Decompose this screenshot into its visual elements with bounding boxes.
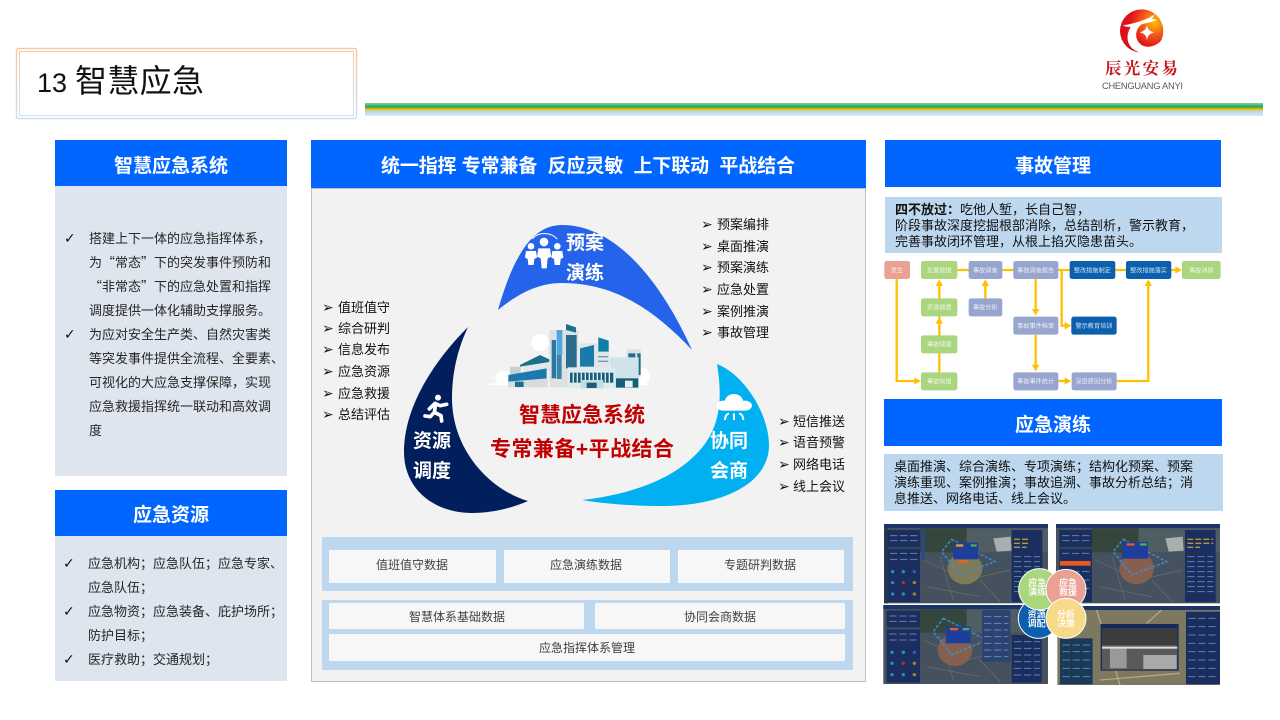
screenshots collage [883, 524, 1220, 685]
flow chart: 警示教育培训 [1076, 322, 1112, 330]
screenshot: bottom right [1057, 606, 1220, 685]
list: plan drills: 案例推演 [717, 304, 769, 319]
heading: emergency resources [55, 490, 287, 536]
list: collaborative consultation: 短信推送 [793, 414, 845, 429]
heading: smart emergency system: 智慧应急系统 [114, 154, 228, 177]
diagram: four circles: 应急 [1028, 577, 1046, 588]
logo: CHENGUANG ANYI [1102, 81, 1183, 91]
segment: plan drills [498, 225, 692, 350]
segment: collaborative consultation: 会商 [710, 460, 748, 482]
list: plan drills: 桌面推演 [717, 239, 769, 254]
list: collaborative consultation: 语音预警 [793, 435, 845, 450]
title box: 智慧应急 [75, 63, 204, 99]
center title: 智慧应急系统 [519, 403, 645, 427]
flow chart: 处置救援 [927, 266, 952, 274]
data row 2: 应急指挥体系管理 [539, 640, 635, 655]
screenshot: bottom left [883, 605, 1048, 684]
center title [490, 403, 674, 461]
text block: system description: 应急救援指挥统一联动和高效调 [89, 399, 271, 414]
segment: resource dispatch: 资源 [413, 430, 451, 452]
list: plan drills: 事故管理 [717, 325, 769, 340]
flow chart: 事故事件档案 [1017, 322, 1054, 330]
text block: resources list: 应急机构；应急队伍；应急专家、 [88, 556, 283, 572]
list: resource dispatch: 综合研判 [338, 321, 390, 336]
diagram: four circles: 演练 [1028, 586, 1046, 597]
screenshot: top left [884, 524, 1048, 603]
text block: system description: 为应对安全生产类、自然灾害类 [89, 327, 271, 342]
list: resource dispatch: ➢ [322, 407, 334, 423]
heading: accident management: 事故管理 [1015, 154, 1091, 177]
list: collaborative consultation: 网络电话 [793, 457, 845, 472]
diagram: four circles: 救援 [1059, 586, 1077, 597]
logo [1102, 9, 1183, 91]
text block: resources list: 防护目标； [88, 628, 153, 644]
center title: 专常兼备+平战结合 [490, 438, 674, 461]
text block: drills description: 息推送、网络电话、线上会议。 [894, 491, 1076, 506]
text block: four no-release: 完善事故闭环管理，从根上掐灭隐患苗头。 [895, 234, 1142, 249]
list: collaborative consultation: 线上会议 [793, 479, 845, 494]
text block: system description: 为“常态”下的突发事件预防和 [89, 252, 271, 271]
list: resource dispatch: 应急资源 [338, 364, 390, 379]
flow chart: 事故调查报告 [1017, 266, 1054, 274]
diagram: four circles [1018, 569, 1086, 638]
text block: resources list: 应急物资；应急装备、庇护场所； [88, 604, 283, 620]
list: plan drills: ➢ [701, 217, 713, 233]
list: plan drills: ➢ [701, 282, 713, 298]
text block: system description: 搭建上下一体的应急指挥体系， [89, 231, 271, 246]
text block: system description [64, 231, 284, 438]
list: resource dispatch: ➢ [322, 300, 334, 316]
flow chart [884, 261, 1221, 390]
segment: plan drills: 预案 [566, 231, 604, 254]
text block: resources list: 应急队伍； [88, 580, 153, 596]
diagram: four circles: 决策 [1057, 618, 1075, 629]
panel: smart emergency system [55, 140, 287, 476]
panel: emergency drills [883, 399, 1223, 685]
text block: drills description: 桌面推演、综合演练、专项演练；结构化预案、预案 [894, 459, 1193, 475]
icon: cloud [716, 394, 752, 420]
list: resource dispatch: 总结评估 [338, 407, 390, 422]
text block: system description: “非常态”下的应急处置和指挥 [89, 276, 271, 295]
flow chart: 事故消除 [1189, 266, 1214, 274]
list: resource dispatch: ➢ [322, 321, 334, 337]
list: resource dispatch: ➢ [322, 386, 334, 402]
text block: four no-release: 阶段事故深度挖掘根部消除，总结剖析，警示教育， [895, 218, 1194, 233]
diagram: four circles: 调配 [1028, 618, 1046, 629]
flow chart: 事故分析 [973, 304, 998, 312]
list: plan drills: 预案编排 [717, 217, 769, 232]
flow chart: 事故快报 [927, 378, 952, 386]
data row 1 [322, 537, 853, 591]
panel: center system [311, 140, 866, 682]
icon: runner [425, 395, 447, 421]
text block: resources list: ✓ [63, 556, 75, 572]
panel: accident management [884, 140, 1222, 390]
list: resource dispatch: 值班值守 [338, 300, 390, 315]
data row 2 [322, 600, 853, 670]
segment: plan drills: 演练 [566, 261, 604, 284]
list: plan drills: ➢ [701, 260, 713, 276]
heading: accident management [885, 140, 1221, 187]
list: plan drills: ➢ [701, 304, 713, 320]
flow chart: 资源调度 [927, 304, 952, 312]
flow chart: 深层原因分析 [1076, 378, 1112, 386]
list: plan drills: 预案演练 [717, 260, 769, 275]
text block: system description: 可视化的大应急支撑保障，实现 [89, 375, 271, 390]
list: resource dispatch: 信息发布 [338, 342, 390, 357]
text block: four no-release [885, 197, 1222, 253]
text block: drills description: 演练重现、案例推演；事故追溯、事故分析总结；消 [894, 475, 1193, 491]
text block: resources list: 医疗救助；交通规划； [88, 652, 218, 668]
heading: emergency drills: 应急演练 [1015, 413, 1091, 436]
heading: center slogan: 统一指挥 专常兼备 反应灵敏 上下联动 平战结合 [381, 154, 795, 177]
title box [16, 48, 356, 118]
segment: collaborative consultation: 协同 [710, 430, 748, 452]
title box: 13 [37, 68, 67, 98]
screenshot: top right [1056, 524, 1220, 603]
header band [365, 103, 1263, 116]
icon: building [490, 324, 650, 388]
text block: resources list: ✓ [63, 652, 75, 668]
data row 2: 智慧体系基础数据 [409, 609, 505, 624]
flow chart: 事故续报 [927, 341, 952, 349]
flow chart: 整改措施落实 [1130, 266, 1167, 274]
data row 1: 值班值守数据 [376, 557, 448, 572]
list: resource dispatch: ➢ [322, 364, 334, 380]
list: plan drills: ➢ [701, 325, 713, 341]
list: collaborative consultation [778, 414, 845, 495]
text block: system description: 等突发事件提供全流程、全要素、 [89, 351, 284, 366]
heading: emergency drills [884, 399, 1222, 446]
logo: 辰光安易 [1105, 55, 1178, 79]
list: plan drills [701, 217, 769, 341]
list: collaborative consultation: ➢ [778, 479, 790, 495]
text block: system description: ✓ [64, 327, 76, 343]
icon: people [525, 233, 563, 268]
diagram: four circles: 分析 [1057, 608, 1075, 619]
list: collaborative consultation: ➢ [778, 457, 790, 473]
flow chart: 整改措施制定 [1074, 266, 1111, 274]
panel: emergency resources [55, 490, 287, 681]
text block: drills description [884, 454, 1223, 511]
list: plan drills: ➢ [701, 239, 713, 255]
heading: smart emergency system [55, 140, 287, 186]
list: resource dispatch: ➢ [322, 342, 334, 358]
text block: resources list [63, 556, 283, 668]
text block: system description: ✓ [64, 231, 76, 247]
flow chart: 发生 [891, 266, 903, 274]
data row 1: 专题研判数据 [724, 557, 796, 572]
segment: collaborative consultation [582, 364, 769, 506]
heading: center slogan [311, 140, 866, 188]
list: collaborative consultation: ➢ [778, 435, 790, 451]
list: plan drills: 应急处置 [717, 282, 769, 297]
list: collaborative consultation: ➢ [778, 414, 790, 430]
segment: resource dispatch [404, 327, 528, 513]
flow chart: 事故事件统计 [1017, 378, 1054, 386]
diagram: four circles: 资源 [1028, 608, 1046, 619]
heading: emergency resources: 应急资源 [133, 503, 209, 526]
flow chart: 事故调查 [973, 266, 998, 274]
text block: system description: 度 [89, 423, 102, 438]
list: resource dispatch: 应急救援 [338, 386, 390, 401]
list: resource dispatch [322, 300, 390, 423]
icon: logo mark [1120, 9, 1164, 53]
data row 2: 协同会商数据 [684, 609, 756, 624]
diagram: four circles: 应急 [1059, 577, 1077, 588]
data row 1: 应急演练数据 [550, 557, 622, 572]
text block: resources list: ✓ [63, 604, 75, 620]
text block: four no-release: 四不放过：吃他人堑，长自己智， [895, 202, 1090, 217]
segment: resource dispatch: 调度 [413, 459, 451, 482]
text block: system description: 调度提供一体化辅助支撑服务。 [89, 303, 271, 318]
